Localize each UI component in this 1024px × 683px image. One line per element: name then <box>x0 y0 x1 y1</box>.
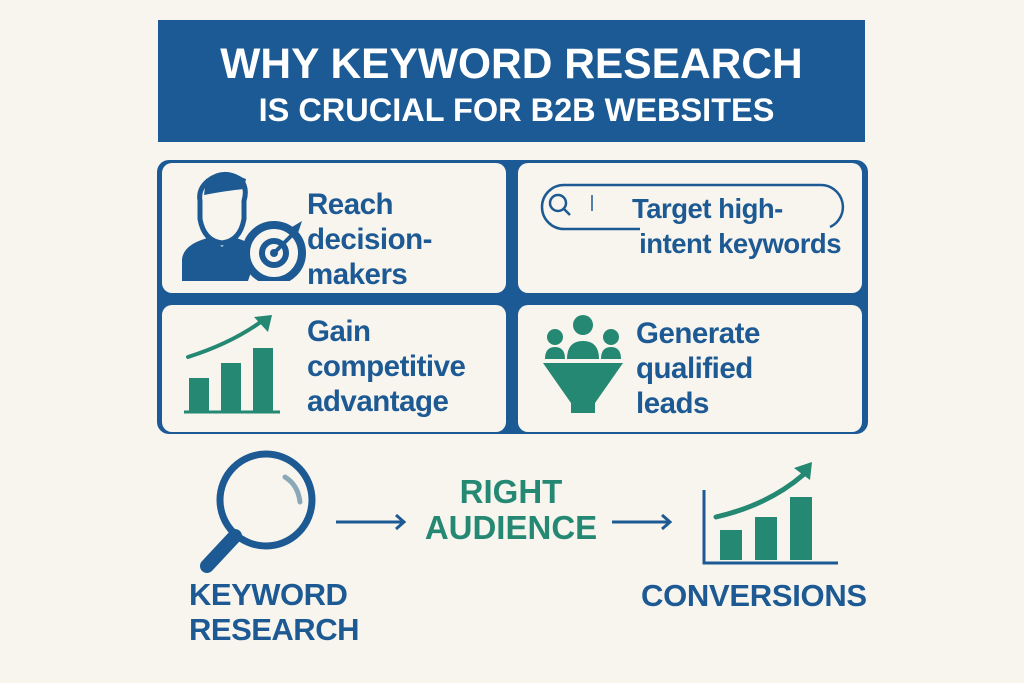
label: right audience: RIGHT <box>460 473 562 510</box>
text: Target high- <box>632 193 783 224</box>
card: target high-intent keywords <box>518 163 862 293</box>
card: reach decision-makers <box>162 163 506 293</box>
text: decision- <box>307 223 432 256</box>
text: makers <box>307 258 407 291</box>
icon: people funnel <box>543 315 623 413</box>
label: conversions: CONVERSIONS <box>641 578 867 613</box>
text: intent keywords <box>639 228 841 259</box>
icon: search bar <box>540 184 844 230</box>
arrow 1 <box>336 514 406 530</box>
label: keyword research: RESEARCH <box>189 612 359 647</box>
text <box>307 315 465 418</box>
title banner <box>158 20 865 142</box>
title banner: WHY KEYWORD RESEARCH <box>220 41 803 88</box>
icon: magnifying glass <box>200 450 316 573</box>
title banner: IS CRUCIAL FOR B2B WEBSITES <box>259 92 774 128</box>
label: keyword research <box>189 577 359 647</box>
icon: growth bar chart <box>184 315 280 414</box>
card: generate qualified leads <box>518 305 862 432</box>
arrow 2 <box>612 514 672 530</box>
text: Gain <box>307 315 371 348</box>
label: right audience: AUDIENCE <box>425 509 597 546</box>
text: competitive <box>307 350 465 383</box>
text <box>632 193 841 259</box>
card: gain competitive advantage <box>162 305 506 432</box>
text <box>636 317 760 420</box>
text: advantage <box>307 385 448 418</box>
text: qualified <box>636 352 753 385</box>
panel grid container <box>157 160 868 434</box>
label: keyword research: KEYWORD <box>189 577 347 612</box>
text: Reach <box>307 188 393 221</box>
text: Generate <box>636 317 760 350</box>
icon: person with target <box>182 172 306 281</box>
icon: conversions chart <box>702 462 838 564</box>
text: leads <box>636 387 709 420</box>
label: right audience <box>425 473 597 546</box>
text <box>307 188 432 291</box>
